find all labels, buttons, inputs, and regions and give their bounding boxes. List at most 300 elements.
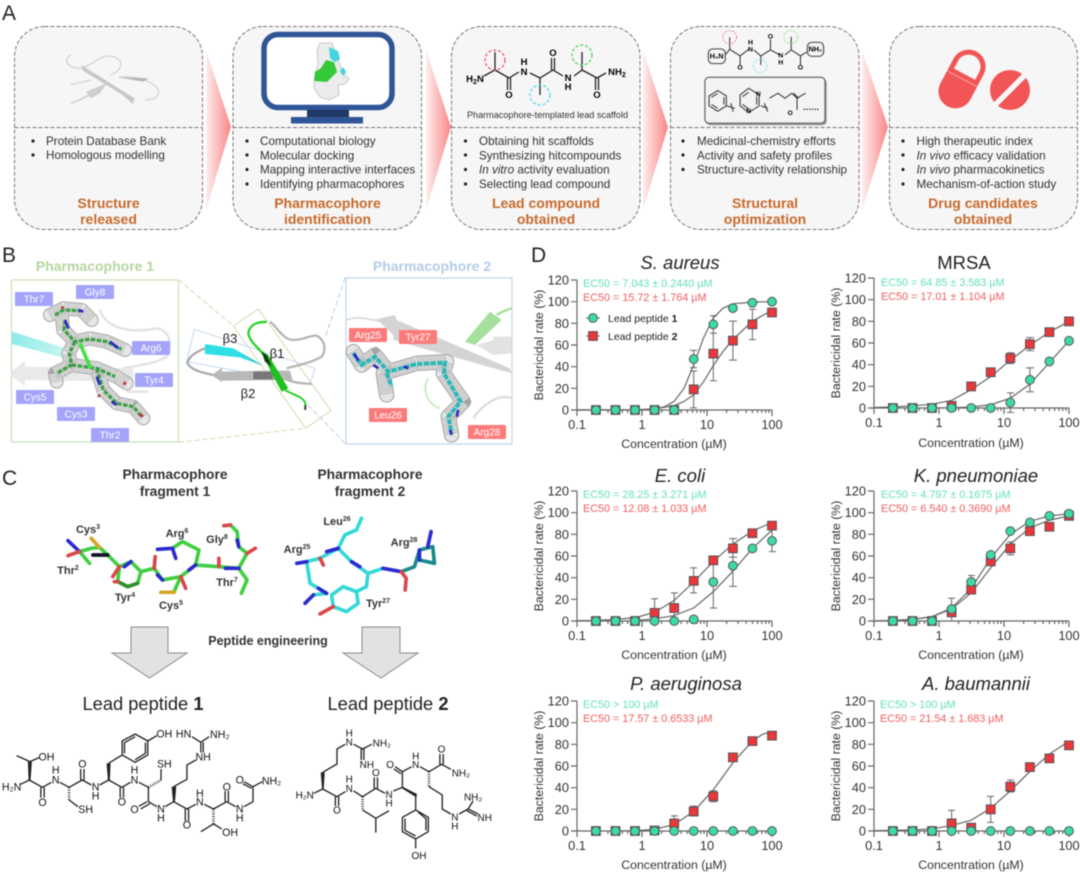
chart: S. aureus: S. aureus bbox=[640, 252, 720, 273]
chemical structure: lead peptide 2: H bbox=[346, 729, 353, 740]
tag: Gly8: Gly8 bbox=[85, 288, 106, 298]
text: bullets: Mechanism-of-action study bbox=[916, 178, 1056, 191]
heading: lead peptide 2: Lead peptide 2 bbox=[328, 693, 448, 714]
chart: P. aeruginosa: 40 bbox=[555, 780, 569, 795]
heading: fragment 2: Pharmacophore bbox=[317, 467, 423, 482]
chart: S. aureus: 120 bbox=[548, 272, 569, 288]
heading: structural optimization: Structural bbox=[732, 195, 798, 211]
diagram: modified scaffold and building blocks: N bbox=[778, 53, 783, 60]
text: bullets: Selecting lead compound bbox=[479, 178, 610, 191]
diagram: pharmacophore-templated scaffold: N bbox=[477, 74, 484, 85]
chart: MRSA: 120 bbox=[845, 270, 866, 286]
chemical structure: lead peptide 1: O bbox=[78, 759, 86, 771]
labels: residues: 3 bbox=[96, 524, 100, 531]
diagram: pharmacophore-templated scaffold: N bbox=[521, 67, 528, 78]
heading: pharmacophore 2: Pharmacophore 2 bbox=[373, 258, 491, 274]
labels: residues bbox=[284, 516, 417, 610]
chart: A. baumannii: 60 bbox=[852, 758, 866, 774]
chart: A. baumannii: A. baumannii bbox=[921, 673, 1031, 694]
diagram: modified scaffold and building blocks: N bbox=[746, 108, 751, 115]
chemical structure: lead peptide 2: OH bbox=[412, 851, 426, 862]
chemical structure: lead peptide 1: OH bbox=[156, 729, 172, 741]
labels: residues: Arg bbox=[284, 544, 303, 556]
labels: residues bbox=[57, 524, 238, 612]
labels: residues: 6 bbox=[185, 528, 189, 535]
text: bullets bbox=[901, 135, 1056, 191]
diagram: modified scaffold and building blocks: O bbox=[798, 64, 803, 71]
chart: A. baumannii: EC50 = 21.54 ± 1.683 µM bbox=[880, 713, 1004, 725]
chart: P. aeruginosa: 10 bbox=[700, 838, 714, 853]
text: bullets bbox=[681, 135, 848, 176]
diagram: pharmacophore-templated scaffold: NH bbox=[608, 67, 622, 78]
text: bullets: Synthesizing hitcompounds bbox=[479, 150, 621, 162]
chemical structure: lead peptide 2: NH₂ bbox=[464, 792, 482, 803]
diagram: modified scaffold and building blocks: NH₂ bbox=[808, 46, 822, 54]
labels: residues: 8 bbox=[224, 534, 228, 541]
text: bullets: High therapeutic index bbox=[916, 135, 1033, 148]
chart: S. aureus: EC50 = 15.72 ± 1.764 µM bbox=[583, 292, 706, 304]
chart: P. aeruginosa: 100 bbox=[548, 715, 569, 730]
arrow: step 4 to 5 bbox=[862, 50, 888, 210]
chart: S. aureus: 100 bbox=[761, 417, 783, 432]
tag: Leu26 bbox=[369, 408, 407, 422]
tag: Cys3: Cys3 bbox=[65, 410, 88, 420]
diagram: pharmacophore-templated scaffold: 2 bbox=[473, 79, 477, 86]
panel letter B: B bbox=[2, 244, 16, 267]
chart: S. aureus: 0.1 bbox=[568, 417, 586, 432]
chemical structure: lead peptide 1: O bbox=[183, 820, 191, 832]
chart: K. pneumoniae: EC50 = 4.797 ± 0.1675 µM bbox=[881, 489, 1011, 501]
labels: residues: 4 bbox=[131, 592, 135, 599]
chart: E. coli: Concentration (µM) bbox=[621, 648, 727, 662]
chart: A. baumannii: 40 bbox=[852, 780, 866, 795]
caption: scaffold: Pharmacophore-templated lead scaffold bbox=[467, 110, 628, 120]
tag: Cys5 bbox=[16, 390, 54, 404]
diagram: pharmacophore-templated scaffold: 2 bbox=[622, 72, 626, 79]
chart: K. pneumoniae: 60 bbox=[852, 548, 866, 564]
text: bullets: Identifying pharmacophores bbox=[260, 178, 404, 191]
panel: structure released bbox=[14, 26, 202, 230]
chart: E. coli: 20 bbox=[555, 592, 569, 607]
diagram: pharmacophore-templated scaffold: H bbox=[466, 74, 473, 85]
chart: E. coli: 120 bbox=[548, 484, 569, 498]
panel: structural optimization bbox=[670, 26, 859, 230]
chemical structure: lead peptide 1: H bbox=[52, 765, 60, 777]
diagram: pharmacophore-templated scaffold: N bbox=[565, 73, 572, 84]
heading: structural optimization: optimization bbox=[724, 211, 806, 227]
chemical structure: lead peptide 1: O bbox=[236, 775, 244, 787]
chemical structure: lead peptide 1: O bbox=[223, 781, 231, 793]
arrow: fragment 2 to lead peptide 2 bbox=[343, 627, 418, 678]
icon: gray protein ribbon bbox=[67, 55, 159, 104]
chart: MRSA: 100 bbox=[845, 292, 866, 307]
chart: S. aureus: 60 bbox=[555, 338, 569, 352]
chart: S. aureus: 10 bbox=[700, 417, 714, 432]
heading: lead compound obtained: obtained bbox=[517, 211, 575, 227]
text: bullets: In vivo pharmacokinetics bbox=[916, 164, 1045, 176]
chart: MRSA: 20 bbox=[852, 379, 866, 394]
panel letter D: D bbox=[531, 244, 546, 267]
chemical structure: lead peptide 1: H bbox=[131, 765, 138, 777]
chart: P. aeruginosa: 120 bbox=[548, 694, 569, 708]
chart: S. aureus: 80 bbox=[555, 316, 569, 331]
tag: Arg25: Arg25 bbox=[355, 330, 382, 342]
chemical structure: lead peptide 1: N bbox=[131, 775, 138, 787]
arrow: fragment 1 to lead peptide 1 bbox=[112, 627, 187, 678]
tag: Arg28: Arg28 bbox=[474, 428, 501, 438]
panel: pharmacophore 1 density map bbox=[12, 280, 178, 442]
chart: E. coli: 0 bbox=[562, 614, 569, 628]
chart: E. coli: 40 bbox=[555, 570, 569, 585]
chemical structure: lead peptide 2: H₂N bbox=[296, 791, 314, 802]
labels: residues: 27 bbox=[382, 598, 390, 605]
labels: residues: Cys bbox=[76, 524, 96, 536]
labels: residues: Thr bbox=[216, 577, 234, 589]
chemical structure: lead peptide 1 bbox=[2, 729, 281, 839]
chemical structure: lead peptide 1: H bbox=[236, 812, 244, 824]
diagram: central peptide ribbon with beta strands bbox=[178, 278, 345, 443]
labels: residues: 2 bbox=[75, 565, 79, 572]
heading: pharmacophore identification: Pharmacophore bbox=[274, 195, 381, 211]
diagram: pharmacophore-templated scaffold: O bbox=[549, 48, 557, 59]
chart: E. coli: 100 bbox=[548, 505, 569, 520]
chart: E. coli: EC50 = 12.08 ± 1.033 µM bbox=[583, 503, 706, 515]
panel: lead compound obtained bbox=[452, 26, 640, 230]
diagram: modified scaffold and building blocks: O bbox=[737, 64, 743, 71]
chart: E. coli: EC50 = 28.25 ± 3.271 µM bbox=[583, 489, 706, 501]
chemical structure: lead peptide 1: H bbox=[92, 790, 99, 802]
diagram: fragment 2 stick model bbox=[284, 516, 434, 614]
diagram: modified scaffold and building blocks: O bbox=[788, 110, 793, 117]
chart: K. pneumoniae: 40 bbox=[852, 570, 866, 585]
tag: Thr2 bbox=[91, 428, 129, 442]
panel letter C: C bbox=[2, 467, 17, 490]
chemical structure: lead peptide 1: NH bbox=[196, 751, 211, 763]
chart: A. baumannii bbox=[829, 673, 1080, 872]
diagram: modified scaffold and building blocks: N bbox=[748, 47, 753, 54]
tag: Cys3 bbox=[57, 407, 95, 421]
section D: bactericidal curves bbox=[531, 244, 1080, 872]
heading: fragment 1: Pharmacophore bbox=[122, 467, 228, 482]
heading: lead peptide 1: Lead peptide 1 bbox=[83, 693, 203, 714]
arrow: step 2 to 3 bbox=[426, 50, 451, 210]
chart: S. aureus: 0 bbox=[562, 402, 569, 418]
text: bullets: Homologous modelling bbox=[46, 149, 165, 162]
legend: Lead peptide 1 bbox=[608, 313, 678, 325]
text: bullets bbox=[245, 135, 415, 191]
labels: residues: Cys bbox=[159, 600, 179, 612]
chart: MRSA: Concentration (µM) bbox=[918, 436, 1024, 450]
labels: residues: Arg bbox=[166, 528, 185, 540]
chart: P. aeruginosa: 20 bbox=[555, 802, 569, 817]
text: bullets: Mapping interactive interfaces bbox=[260, 164, 415, 176]
label: peptide engineering: Peptide engineering bbox=[208, 634, 328, 648]
legend bbox=[586, 313, 678, 343]
chemical structure: lead peptide 2: H bbox=[386, 799, 393, 810]
chemical structure: lead peptide 1: OH bbox=[39, 751, 54, 763]
chart: P. aeruginosa: 0 bbox=[562, 824, 569, 838]
heading: drug candidates obtained: Drug candidates bbox=[928, 195, 1038, 211]
labels: residues: Leu bbox=[323, 516, 343, 528]
chart: A. baumannii: 0.1 bbox=[865, 838, 883, 853]
text: bullets: Structure-activity relationship bbox=[697, 164, 848, 176]
tag: Arg6: Arg6 bbox=[140, 344, 162, 354]
legend: Lead peptide 2 bbox=[608, 331, 678, 343]
tag: Tyr4 bbox=[135, 373, 173, 387]
chemical structure: lead peptide 1: SH bbox=[78, 804, 93, 816]
chemical structure: lead peptide 2: O bbox=[438, 745, 446, 756]
panel: pharmacophore 2 density map bbox=[346, 278, 512, 444]
chart: A. baumannii: Concentration (µM) bbox=[918, 858, 1024, 872]
panel letter A: A bbox=[2, 2, 16, 25]
chart: E. coli: E. coli bbox=[655, 465, 706, 486]
chemical structure: lead peptide 1: N bbox=[52, 775, 60, 787]
chart: MRSA: Bactericidal rate (%) bbox=[829, 288, 843, 398]
diagram: pharmacophore-templated scaffold: H bbox=[565, 82, 572, 93]
text: bullets: Computational biology bbox=[260, 135, 376, 148]
heading: pharmacophore identification: identification bbox=[284, 211, 371, 227]
chemical structure: lead peptide 2: N bbox=[412, 760, 419, 771]
diagram: modified scaffold and building blocks: H₂N bbox=[710, 52, 723, 60]
chemical structure: lead peptide 1: O bbox=[130, 804, 139, 816]
section B: pharmacophore structures bbox=[2, 244, 512, 444]
labels: residues: Tyr bbox=[115, 592, 131, 604]
diagram: central peptide ribbon with beta strands: β1 bbox=[270, 346, 284, 361]
chart: MRSA: 1 bbox=[935, 415, 943, 430]
chart: P. aeruginosa: EC50 > 100 µM bbox=[583, 699, 659, 711]
chemical structure: lead peptide 2: NH₂ bbox=[452, 769, 470, 780]
tag: Arg6 bbox=[132, 341, 170, 355]
tag: Cys5: Cys5 bbox=[24, 392, 47, 404]
chart: K. pneumoniae: 100 bbox=[1058, 628, 1080, 643]
arrow: step 3 to 4 bbox=[643, 50, 668, 210]
chart: MRSA: 60 bbox=[852, 336, 866, 350]
chart: K. pneumoniae: 1 bbox=[935, 628, 943, 643]
chart: S. aureus: EC50 = 7.043 ± 0.2440 µM bbox=[583, 278, 713, 290]
chemical structure: lead peptide 1: H bbox=[196, 788, 204, 800]
tag: Thr2: Thr2 bbox=[100, 430, 121, 442]
icon: computer monitor with protein surface bbox=[264, 34, 392, 124]
chart: P. aeruginosa: 60 bbox=[555, 758, 569, 774]
section A: discovery workflow bbox=[2, 2, 1078, 230]
chemical structure: lead peptide 1: N bbox=[92, 781, 99, 793]
chart: MRSA: MRSA bbox=[937, 252, 991, 273]
chemical structure: lead peptide 2: NH₂ bbox=[373, 739, 391, 750]
text: bullets: In vitro activity evaluation bbox=[479, 164, 610, 176]
chart: S. aureus: Concentration (µM) bbox=[621, 437, 727, 451]
diagram: modified scaffold and building blocks: N bbox=[756, 91, 761, 98]
chemical structure: lead peptide 1: O bbox=[38, 797, 47, 809]
chemical structure: lead peptide 2: N bbox=[346, 784, 353, 795]
chemical structure: lead peptide 1: OH bbox=[222, 827, 238, 839]
arrow: step 1 to 2 bbox=[206, 50, 231, 210]
diagram: modified scaffold and building blocks bbox=[705, 31, 827, 125]
chemical structure: lead peptide 2: O bbox=[386, 760, 394, 771]
diagram: pharmacophore-templated scaffold bbox=[466, 45, 626, 105]
chart: P. aeruginosa: 0.1 bbox=[568, 838, 586, 853]
chemical structure: lead peptide 1: N bbox=[196, 796, 204, 808]
chart: E. coli bbox=[532, 465, 783, 662]
chart: MRSA: 40 bbox=[852, 357, 866, 372]
chart: K. pneumoniae: 100 bbox=[845, 505, 866, 520]
chemical structure: lead peptide 1: HN bbox=[176, 729, 191, 741]
heading: structure released: Structure bbox=[77, 195, 140, 211]
chart: A. baumannii: 10 bbox=[997, 838, 1011, 853]
chemical structure: lead peptide 1: NH₂ bbox=[210, 729, 230, 741]
text: bullets: Protein Database Bank bbox=[46, 135, 166, 148]
tag: Tyr27 bbox=[399, 330, 437, 344]
chart: K. pneumoniae: 0.1 bbox=[865, 628, 883, 643]
chemical structure: lead peptide 2: N bbox=[451, 812, 458, 823]
chart: S. aureus bbox=[532, 252, 783, 451]
chemical structure: lead peptide 1: SH bbox=[157, 759, 172, 771]
panel: pharmacophore identification bbox=[233, 26, 422, 230]
labels: residues: 5 bbox=[179, 600, 183, 607]
chart: P. aeruginosa: 1 bbox=[638, 838, 646, 853]
chart: A. baumannii: 80 bbox=[852, 737, 866, 752]
heading: drug candidates obtained: obtained bbox=[954, 211, 1012, 227]
labels: residues: 28 bbox=[410, 537, 417, 544]
chart: MRSA: 10 bbox=[997, 415, 1011, 430]
labels: residues: Tyr bbox=[366, 598, 382, 610]
chart: A. baumannii: Bactericidal rate (%) bbox=[829, 711, 843, 821]
chemical structure: lead peptide 1: H bbox=[157, 812, 165, 824]
labels: residues: 25 bbox=[303, 544, 310, 551]
chemical structure: lead peptide 2: H bbox=[412, 751, 419, 762]
icon: capsule and tablet bbox=[932, 46, 1040, 120]
chart: E. coli: 0.1 bbox=[568, 628, 586, 643]
chemical structure: lead peptide 1: O bbox=[118, 796, 126, 808]
chart: MRSA: 0.1 bbox=[865, 415, 883, 430]
text: bullets: Medicinal-chemistry efforts bbox=[697, 135, 836, 148]
labels: residues: 26 bbox=[343, 516, 351, 523]
text: bullets bbox=[31, 135, 166, 162]
text: bullets: In vivo efficacy validation bbox=[916, 150, 1046, 162]
chemical structure: lead peptide 1: N bbox=[236, 804, 244, 816]
chart: MRSA: EC50 = 17.01 ± 1.104 µM bbox=[881, 291, 1004, 303]
chart: E. coli: 80 bbox=[555, 527, 569, 542]
heading: lead compound obtained: Lead compound bbox=[492, 195, 600, 211]
diagram: modified scaffold and building blocks: ...... bbox=[803, 102, 819, 113]
tag: Tyr27: Tyr27 bbox=[405, 332, 431, 344]
heading: fragment 1: fragment 1 bbox=[140, 484, 211, 499]
chart: K. pneumoniae: 20 bbox=[852, 592, 866, 607]
chemical structure: lead peptide 2: O bbox=[333, 806, 341, 817]
chart: S. aureus: 100 bbox=[548, 294, 569, 309]
chemical structure: lead peptide 2: H bbox=[346, 775, 353, 786]
chart: S. aureus: 1 bbox=[638, 417, 646, 432]
tag: Arg25 bbox=[349, 328, 387, 342]
chemical structure: lead peptide 2: N bbox=[386, 790, 393, 801]
chemical structure: lead peptide 2: H bbox=[451, 821, 458, 832]
chart: A. baumannii: 1 bbox=[935, 838, 943, 853]
text: bullets: Obtaining hit scaffolds bbox=[479, 135, 594, 148]
chart: K. pneumoniae: Bactericidal rate (%) bbox=[829, 501, 843, 611]
chart: P. aeruginosa: 100 bbox=[761, 838, 783, 853]
chart: E. coli: 100 bbox=[761, 628, 783, 643]
chart: A. baumannii: 20 bbox=[852, 802, 866, 817]
chart: K. pneumoniae: EC50 = 6.540 ± 0.3690 µM bbox=[881, 503, 1011, 515]
chart: A. baumannii: 0 bbox=[859, 824, 866, 838]
tag: Tyr4: Tyr4 bbox=[144, 376, 164, 386]
chart: A. baumannii: 100 bbox=[845, 715, 866, 730]
chart: E. coli: 1 bbox=[638, 628, 646, 643]
chart: P. aeruginosa: Concentration (µM) bbox=[621, 858, 727, 872]
chemical structure: lead peptide 1: H₂N bbox=[2, 781, 21, 793]
text: bullets bbox=[464, 135, 621, 191]
diagram: fragment 1 stick model bbox=[57, 524, 255, 612]
chart: K. pneumoniae: K. pneumoniae bbox=[914, 465, 1038, 486]
chart: P. aeruginosa: Bactericidal rate (%) bbox=[532, 711, 546, 821]
chemical structure: lead peptide 1: N bbox=[157, 804, 165, 816]
panel: drug candidates obtained bbox=[890, 26, 1078, 230]
chemical structure: lead peptide 2: O bbox=[372, 768, 380, 779]
diagram: modified scaffold and building blocks: O bbox=[768, 34, 773, 41]
chart: MRSA: 100 bbox=[1058, 415, 1080, 430]
section C: peptide engineering bbox=[2, 467, 492, 862]
diagram: modified scaffold and building blocks: H bbox=[778, 59, 783, 66]
text: bullets: Molecular docking bbox=[260, 150, 354, 162]
tag: Thr7 bbox=[15, 292, 53, 306]
diagram: central peptide ribbon with beta strands: β2 bbox=[241, 386, 255, 401]
chart: MRSA bbox=[829, 252, 1080, 450]
chart: K. pneumoniae: 0 bbox=[859, 614, 866, 628]
diagram: pharmacophore-templated scaffold: H bbox=[521, 57, 528, 68]
chart: P. aeruginosa: EC50 = 17.57 ± 0.6533 µM bbox=[583, 713, 713, 725]
chart: K. pneumoniae bbox=[829, 465, 1080, 662]
tag: Gly8 bbox=[76, 285, 114, 299]
tag: Thr7: Thr7 bbox=[24, 294, 45, 306]
chart: P. aeruginosa: P. aeruginosa bbox=[630, 673, 742, 694]
chart: K. pneumoniae: 80 bbox=[852, 527, 866, 542]
chart: E. coli: 60 bbox=[555, 548, 569, 564]
chart: S. aureus: Bactericidal rate (%) bbox=[532, 290, 546, 400]
diagram: modified scaffold and building blocks: H bbox=[748, 39, 753, 46]
heading: fragment 2: fragment 2 bbox=[335, 484, 406, 499]
chart: P. aeruginosa bbox=[532, 673, 783, 872]
tag: Arg28 bbox=[468, 425, 506, 439]
heading: pharmacophore 1: Pharmacophore 1 bbox=[36, 258, 154, 274]
labels: residues: 7 bbox=[234, 577, 238, 584]
chart: A. baumannii: 100 bbox=[1058, 838, 1080, 853]
diagram: central peptide ribbon with beta strands: β3 bbox=[223, 331, 237, 346]
chart: S. aureus: 40 bbox=[555, 359, 569, 374]
chart: A. baumannii: 120 bbox=[845, 694, 866, 708]
chemical structure: lead peptide 2: NH bbox=[360, 760, 374, 771]
chart: K. pneumoniae: 120 bbox=[845, 484, 866, 498]
chart: E. coli: 10 bbox=[700, 628, 714, 643]
labels: residues: Gly bbox=[206, 534, 224, 546]
labels: residues: Thr bbox=[57, 565, 75, 577]
heading: structure released: released bbox=[80, 211, 137, 227]
chart: E. coli: Bactericidal rate (%) bbox=[532, 501, 546, 611]
chart: K. pneumoniae: Concentration (µM) bbox=[918, 648, 1024, 662]
chart: P. aeruginosa: 80 bbox=[555, 737, 569, 752]
chart: S. aureus: 20 bbox=[555, 381, 569, 396]
chart: MRSA: 80 bbox=[852, 314, 866, 329]
diagram: pharmacophore-templated scaffold: O bbox=[505, 90, 513, 101]
chemical structure: lead peptide 2: NH bbox=[478, 813, 492, 824]
text: bullets: Activity and safety profiles bbox=[697, 150, 832, 162]
chemical structure: lead peptide 2 bbox=[296, 729, 492, 862]
chemical structure: lead peptide 1: NH₂ bbox=[262, 776, 281, 788]
chart: MRSA: EC50 = 64.85 ± 3.583 µM bbox=[881, 277, 1004, 289]
diagram: pharmacophore-templated scaffold: O bbox=[593, 90, 601, 101]
chart: K. pneumoniae: 10 bbox=[997, 628, 1011, 643]
chart: A. baumannii: EC50 > 100 µM bbox=[880, 699, 956, 711]
chart: MRSA: 0 bbox=[859, 400, 866, 416]
labels: residues: Arg bbox=[391, 537, 410, 549]
